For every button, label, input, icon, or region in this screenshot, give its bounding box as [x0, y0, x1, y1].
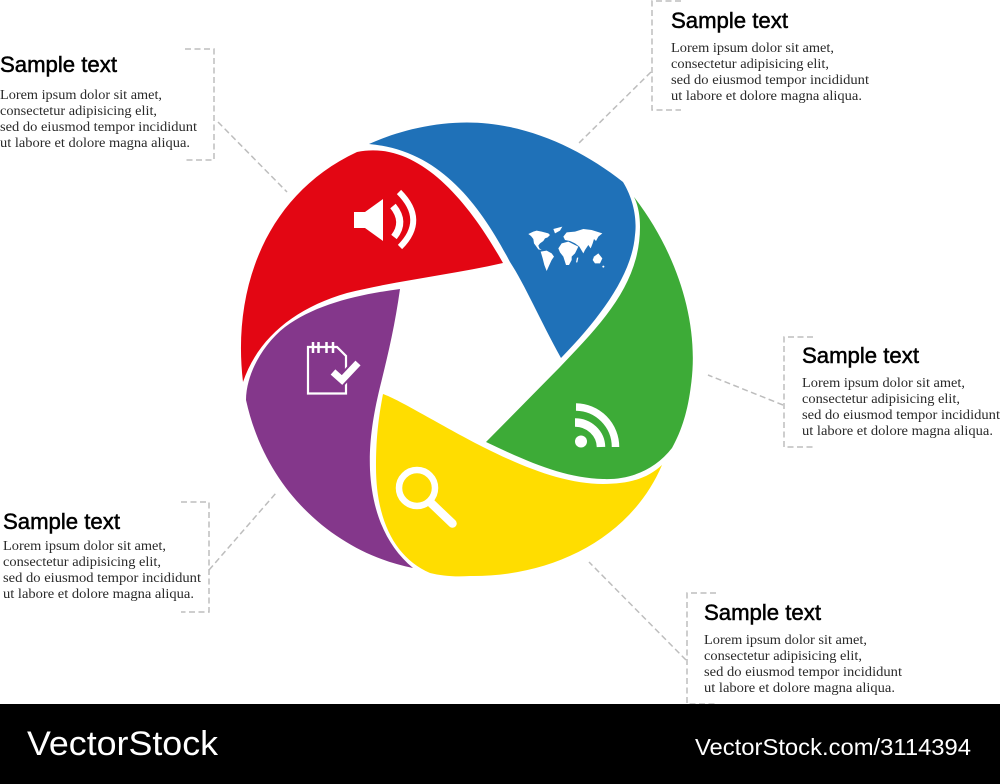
segment: red — [241, 150, 503, 382]
text block: ut labore et dolore magna aliqua. — [802, 423, 993, 438]
text block: Lorem ipsum dolor sit amet, — [704, 632, 867, 647]
text block: sed do eiusmod tempor incididunt — [3, 570, 201, 585]
text block: consectetur adipisicing elit, — [3, 554, 161, 569]
icon: magnifier — [399, 470, 452, 524]
callout: bottom right sample text — [589, 562, 902, 704]
text block: sed do eiusmod tempor incididunt — [704, 664, 902, 679]
callout: right sample text — [708, 337, 1000, 447]
text block — [704, 632, 902, 695]
segment: yellow — [376, 394, 662, 576]
text block: ut labore et dolore magna aliqua. — [0, 135, 190, 150]
icon: notepad with check — [308, 342, 358, 394]
callout: top left sample text — [0, 49, 287, 192]
text block: ut labore et dolore magna aliqua. — [704, 680, 895, 695]
text block: Lorem ipsum dolor sit amet, — [802, 375, 965, 390]
text block: sed do eiusmod tempor incididunt — [0, 119, 197, 134]
text block: consectetur adipisicing elit, — [0, 103, 157, 118]
text block: sed do eiusmod tempor incididunt — [671, 72, 869, 87]
footer logo text: VectorStock — [27, 725, 219, 763]
heading: Sample text — [802, 343, 919, 368]
callout: bottom left sample text — [3, 493, 276, 612]
text block — [0, 87, 197, 150]
text block — [802, 375, 1000, 438]
text block — [3, 538, 201, 601]
circular shutter diagram — [241, 122, 693, 576]
footer bar — [0, 704, 1000, 784]
segment: blue — [369, 122, 636, 358]
icon: speaker — [354, 192, 413, 247]
text block: ut labore et dolore magna aliqua. — [3, 586, 194, 601]
text block: consectetur adipisicing elit, — [704, 648, 862, 663]
icon: world map — [528, 227, 604, 271]
text block: Lorem ipsum dolor sit amet, — [0, 87, 162, 102]
text block: ut labore et dolore magna aliqua. — [671, 88, 862, 103]
heading: Sample text — [671, 8, 788, 33]
segment: green — [486, 197, 693, 479]
text block: Lorem ipsum dolor sit amet, — [3, 538, 166, 553]
heading: Sample text — [3, 509, 120, 534]
text block: sed do eiusmod tempor incididunt — [802, 407, 1000, 422]
text block: consectetur adipisicing elit, — [671, 56, 829, 71]
text block — [671, 40, 869, 103]
heading: Sample text — [0, 52, 117, 77]
footer image id: VectorStock.com/3114394 — [695, 734, 971, 760]
text block: consectetur adipisicing elit, — [802, 391, 960, 406]
text block: Lorem ipsum dolor sit amet, — [671, 40, 834, 55]
heading: Sample text — [704, 600, 821, 625]
callout: top right sample text — [579, 1, 869, 143]
segment: purple — [246, 289, 413, 568]
icon: rss — [575, 407, 616, 448]
